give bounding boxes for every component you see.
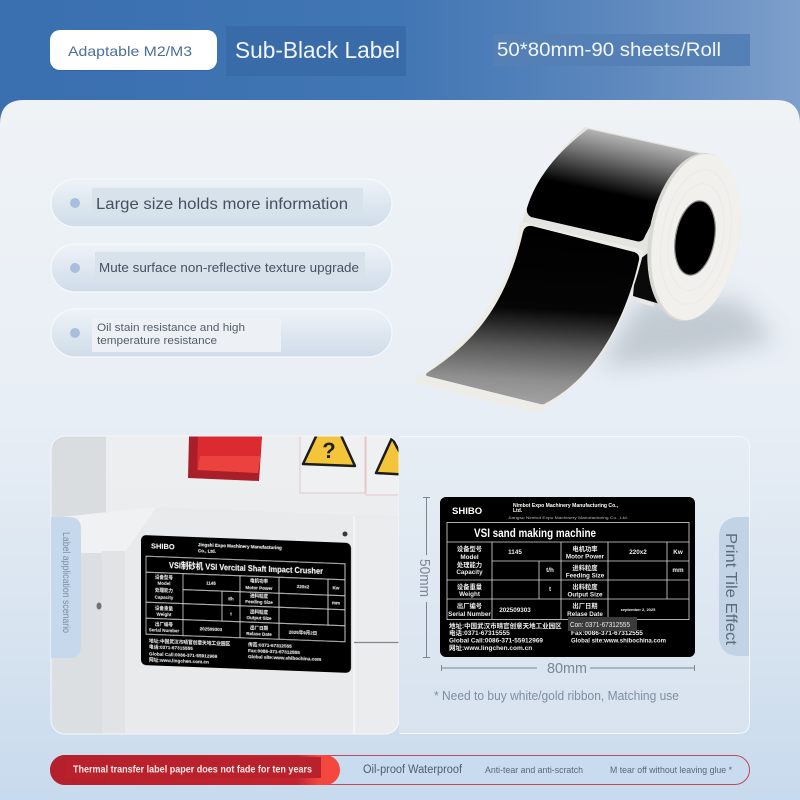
printed black label sample: Jiangsu Nimbot Expo Machinery Manufacturing Co., Ltd. (508, 516, 628, 520)
applied black label: 设备型号 (155, 574, 173, 581)
red highlight pill (50, 755, 340, 785)
printed black label sample: t/h (546, 567, 554, 574)
printed black label sample: Relase Date (567, 611, 603, 618)
printed black label sample: Capacity (456, 569, 483, 576)
printed black label sample: Global site:www.shibochina.com (571, 638, 666, 644)
applied black label: Jingshi Expo Machinery Manufacturing (198, 542, 282, 550)
bottom feature bar: Oil-proof Waterproof (363, 764, 463, 776)
red highlight pill: Thermal transfer label paper does not fade for ten years (73, 764, 312, 776)
ribbon note: * Need to buy white/gold ribbon, Matching use (434, 689, 679, 703)
applied black label: Fax:0086-371-67312555 (248, 648, 300, 655)
applied black label: Kw (333, 585, 340, 591)
applied black label: Weight (157, 612, 172, 617)
applied black label: 出料粒度 (250, 608, 268, 616)
printed black label sample: Kw (673, 549, 683, 556)
feature pill: mute surface (51, 244, 392, 292)
printed black label sample: 出厂编号 (457, 601, 482, 610)
applied black label: 进料粒度 (250, 592, 268, 600)
printed black label sample: VSI sand making machine (474, 526, 596, 540)
feature pill: large size (51, 179, 392, 227)
printed black label sample: 电话:0371-67315555 (449, 628, 510, 637)
bottom feature bar: M tear off without leaving glue * (610, 765, 732, 776)
applied black label: Model (158, 581, 170, 586)
printed black label sample: Serial Number (448, 611, 491, 618)
printed black label sample: Global Call:0086-371-55912969 (449, 638, 543, 644)
printed black label sample: SHIBO (452, 506, 482, 517)
printed black label sample: Model (460, 554, 479, 561)
panel: label application photo (52, 436, 398, 734)
printed black label sample: Feeding Size (566, 572, 605, 580)
applied black label: t/h (228, 596, 234, 602)
product image: label roll (412, 127, 775, 413)
printed black label sample: 1145 (508, 549, 522, 556)
printed black label sample: mm (672, 567, 684, 574)
applied black label: Output Size (247, 615, 272, 621)
size specification (493, 34, 750, 66)
printed black label sample: Output Size (568, 592, 603, 598)
applied black label: 处理能力 (155, 587, 173, 594)
applied black label: Feeding Size (245, 599, 273, 605)
printed black label sample: Nimbot Expo Machinery Manufacturing Co., (513, 503, 619, 509)
photo panel border (51, 436, 399, 734)
applied black label: 电机功率 (250, 577, 268, 585)
dimension: 50mm height (416, 498, 433, 658)
printed black label sample: 220x2 (629, 549, 647, 556)
tab: label application scenario (51, 517, 81, 658)
printed black label sample: Motor Power (566, 554, 605, 560)
printed black label sample: 出料粒度 (572, 582, 598, 591)
feature pill: oil stain: temperature resistance (97, 335, 217, 347)
applied black label: t (230, 611, 232, 616)
applied black label: Serial Number (149, 627, 179, 633)
feature pill: mute surface: Mute surface non-reflective texture upgrade (99, 261, 359, 275)
printed black label sample: september 2, 2025 (621, 607, 656, 612)
applied black label: VSI制砂机 VSI Vercital Shaft Impact Crusher (169, 560, 324, 576)
header band (0, 0, 800, 130)
contact tooltip (568, 617, 637, 631)
printed black label sample: 202509303 (499, 607, 531, 614)
dimension: 80mm width (442, 660, 694, 677)
printed black label sample: 进料粒度 (572, 563, 598, 572)
panel: print effect (399, 436, 750, 734)
applied black label: Global Call:0086-371-55912969 (149, 651, 218, 659)
feature pill: large size: Large size holds more information (96, 196, 348, 213)
printed black label sample (440, 497, 695, 657)
tab: print title effect (719, 517, 749, 656)
applied black label: 2025年9月2日 (289, 629, 317, 637)
printed black label sample: 设备型号 (457, 544, 482, 553)
applied black label: Motor Power (245, 585, 273, 591)
printed black label sample: 出厂日期 (572, 601, 598, 610)
warning sign panel one: ? (322, 438, 336, 463)
applied black label: 出厂日期 (250, 624, 268, 632)
size specification: 50*80mm-90 sheets/Roll (497, 39, 721, 61)
title: Sub-Black Label (235, 37, 400, 63)
applied black label: 地址:中国武汉市晴官创意天地工业园区 (149, 637, 231, 647)
printed black label sample: 电机功率 (572, 544, 598, 553)
applied black label: Global site:www.shibochina.com (248, 654, 321, 662)
feature pill: oil stain (51, 309, 392, 357)
applied black label (141, 535, 351, 673)
applied black label: 202509303 (200, 626, 223, 632)
applied black label: 电话:0371-67315555 (149, 643, 193, 652)
printed black label sample: Weight (459, 591, 481, 598)
applied black label: Co., Ltd. (198, 548, 216, 554)
printed black label sample: 处理能力 (457, 560, 482, 569)
dimension: 80mm width: 80mm (547, 660, 587, 677)
bottom feature bar: Anti-tear and anti-scratch (485, 765, 583, 776)
icon: red warning light (188, 436, 262, 481)
applied black label: 1145 (206, 580, 216, 586)
printed black label sample: 设备重量 (457, 582, 483, 591)
applied black label: Capacity (155, 595, 174, 600)
printed black label sample: 网址:www.lingchen.com.cn (449, 643, 532, 652)
applied black label: 设备重量 (155, 605, 173, 612)
applied black label: Relase Date (246, 631, 272, 637)
contact tooltip: Con: 0371-67312555 (570, 622, 630, 629)
applied black label: 出厂编号 (155, 621, 173, 628)
printed black label sample: Fax:0086-371-67312555 (571, 630, 643, 637)
compatibility badge (50, 30, 217, 71)
applied black label: 网址:www.lingchen.com.cn (149, 656, 209, 666)
feature pill: oil stain: Oil stain resistance and high (97, 322, 245, 334)
dimension: 50mm height: 50mm (416, 559, 433, 597)
printed black label sample: 地址:中国武汉市晴官创意天地工业园区 (449, 621, 562, 630)
applied black label: SHIBO (151, 541, 175, 551)
printed black label sample: Ltd. (513, 508, 523, 514)
applied black label: 传真:0371-67312555 (248, 641, 292, 650)
applied black label: mm (332, 600, 340, 606)
warning sign panel one (300, 436, 366, 494)
warning sign panel two (366, 436, 398, 496)
tab: print title effect: Print Tile Effect (722, 533, 739, 646)
compatibility badge: Adaptable M2/M3 (68, 43, 192, 59)
bottom feature bar (50, 755, 750, 785)
printed black label sample: t (549, 586, 552, 593)
tab: label application scenario: Label application scenario (60, 532, 72, 633)
title (226, 26, 406, 76)
applied black label: 220x2 (297, 584, 310, 589)
